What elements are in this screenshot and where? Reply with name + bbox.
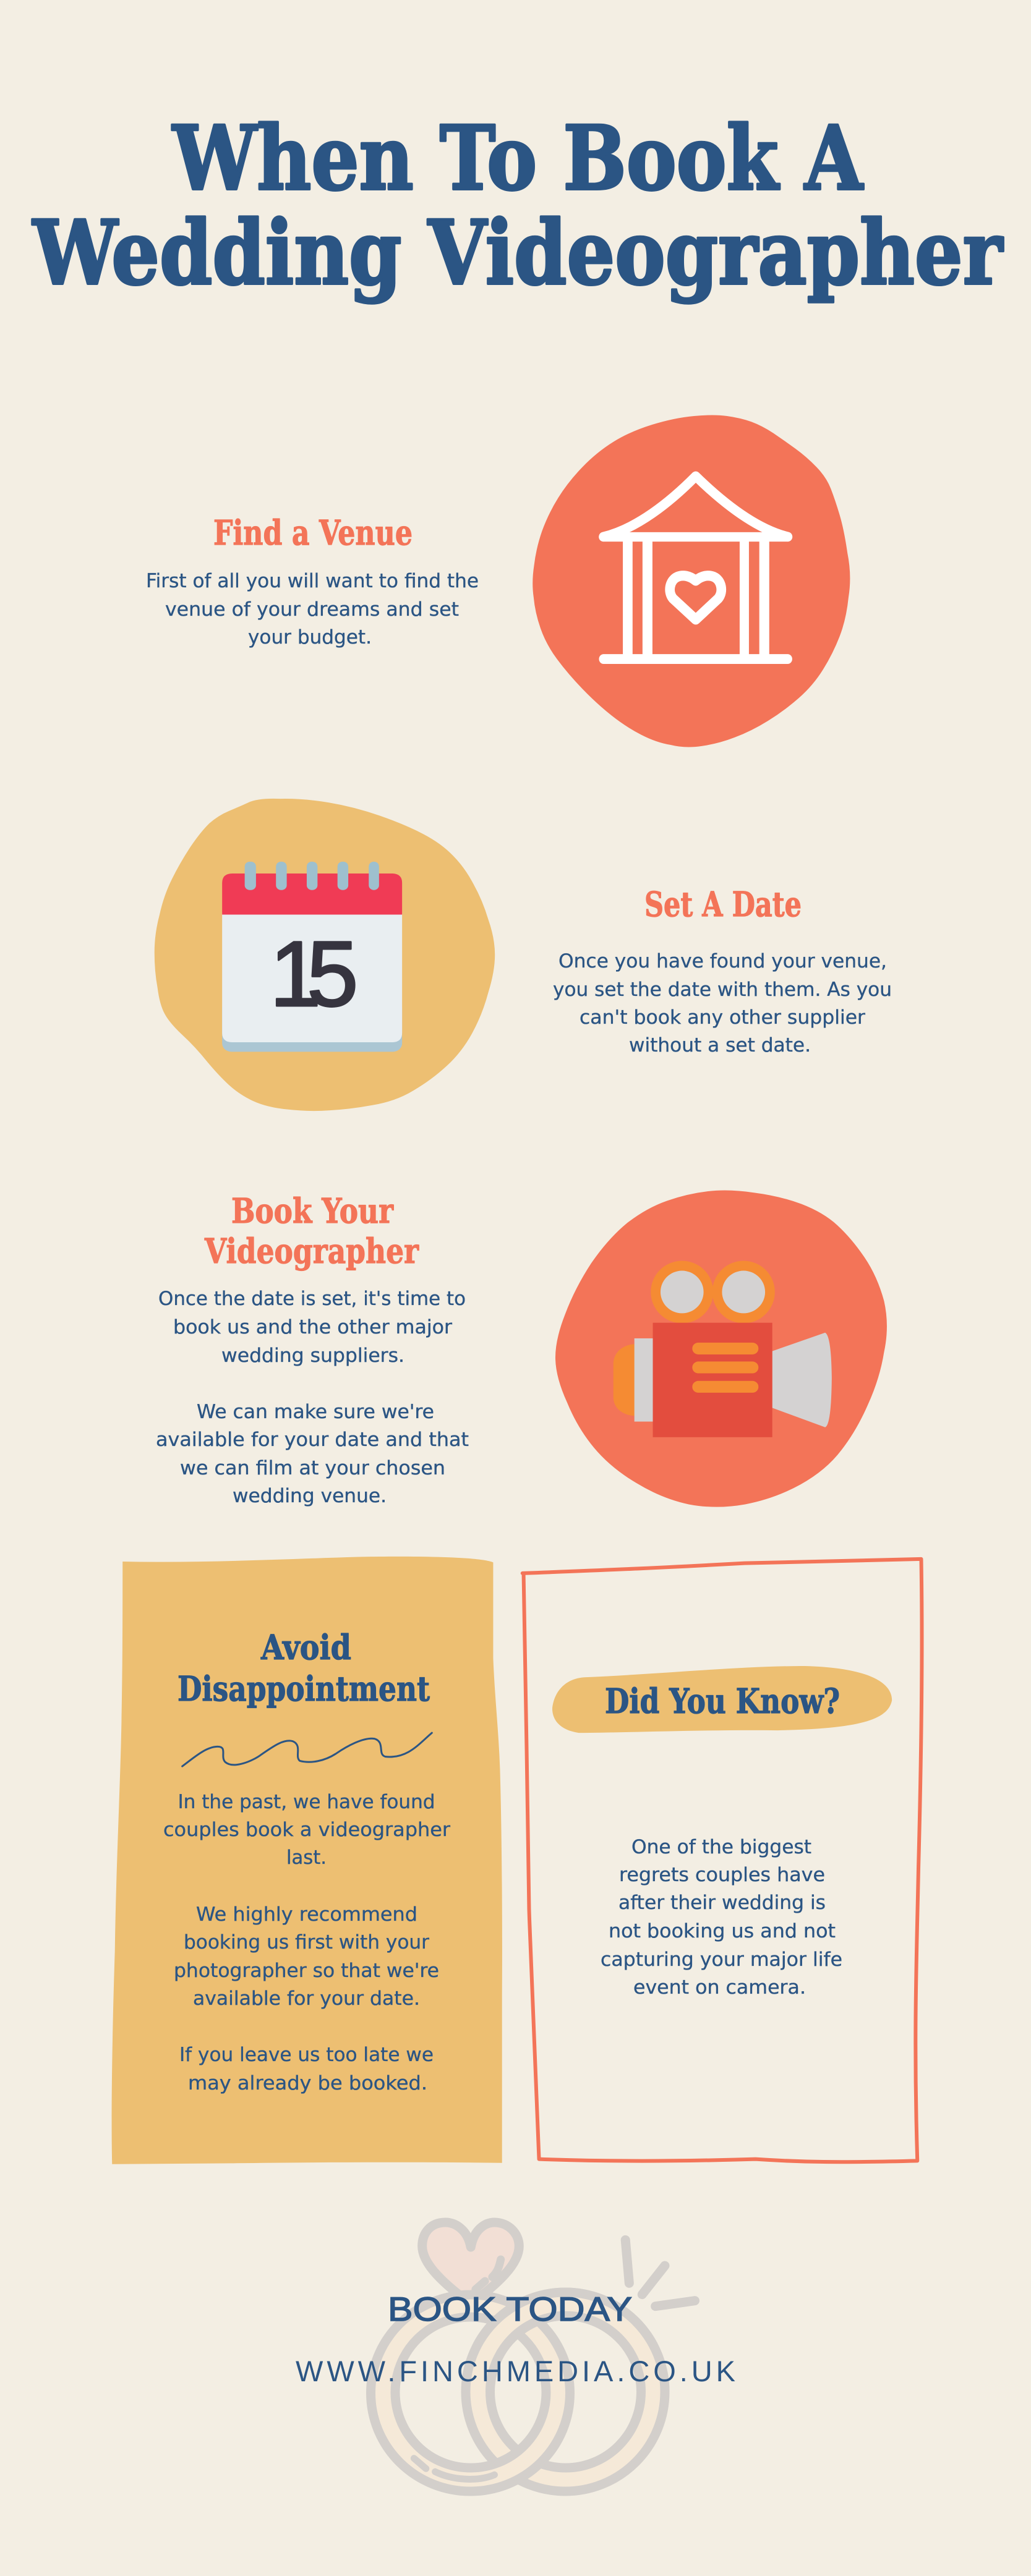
ring right: [466, 2292, 665, 2491]
text block: did you know: after their wedding is: [618, 1892, 826, 1914]
text block: set a date: you set the date with them. As you: [553, 979, 892, 1001]
icon: film camera on orange blob: [555, 1191, 887, 1507]
panel: find a venue: [146, 415, 850, 747]
text block: find a venue: First of all you will want to find the: [146, 570, 479, 592]
heading: avoid disappointment: Avoid: [260, 1627, 351, 1667]
ring right front overlap: [474, 2306, 657, 2343]
text block: did you know: not booking us and not: [609, 1920, 836, 1942]
heading: did you know: Did You Know?: [605, 1681, 840, 1721]
heading: set a date: Set A Date: [644, 884, 802, 924]
call to action: book today: BOOK TODAY: [388, 2290, 632, 2328]
ring highlight: [414, 2459, 494, 2479]
text block: avoid disappointment: couples book a videographer: [163, 1819, 450, 1841]
text block: did you know: [601, 1836, 842, 1999]
text block: avoid disappointment: We highly recommend: [196, 1903, 417, 1926]
text block: avoid disappointment: may already be booked.: [188, 2072, 427, 2094]
panel: set a date: [155, 799, 892, 1111]
heart on ring: [422, 2222, 519, 2304]
text block: book your videographer: wedding venue.: [233, 1485, 387, 1507]
text block: set a date: [553, 950, 892, 1056]
icon: wedding rings with heart: [371, 2222, 695, 2491]
panel: book today footer: [296, 2222, 735, 2491]
text block: did you know: regrets couples have: [619, 1864, 825, 1886]
squiggle line: [182, 1733, 432, 1766]
text block: avoid disappointment: last.: [286, 1847, 327, 1869]
text block: find a venue: venue of your dreams and set: [165, 598, 459, 621]
icon: calendar on yellow blob: [155, 799, 495, 1111]
hand-drawn outline box: [523, 1559, 922, 2162]
text block: find a venue: your budget.: [248, 626, 372, 648]
website url: WWW.FINCHMEDIA.CO.UK: [296, 2355, 735, 2387]
text block: book your videographer: wedding suppliers.: [221, 1345, 404, 1367]
text block: did you know: capturing your major life: [601, 1949, 842, 1971]
heading: book your videographer: [204, 1191, 419, 1271]
text block: did you know: One of the biggest: [631, 1836, 811, 1858]
text block: avoid disappointment: available for your date.: [193, 1987, 420, 2010]
panel: avoid disappointment: [112, 1557, 502, 2164]
heading: avoid disappointment: [178, 1627, 430, 1709]
text block: did you know: event on camera.: [633, 1976, 806, 1999]
heading: avoid disappointment: Disappointment: [178, 1668, 430, 1709]
text block: book your videographer: available for your date and that: [156, 1429, 469, 1451]
text block: avoid disappointment: photographer so that we're: [174, 1960, 439, 1982]
text block: avoid disappointment: In the past, we have found: [178, 1791, 435, 1813]
text block: book your videographer: Once the date is set, it's time to: [158, 1288, 466, 1310]
text block: book your videographer: we can film at your chosen: [180, 1457, 445, 1479]
text block: avoid disappointment: booking us first with your: [184, 1931, 429, 1953]
calendar number: 15: [270, 922, 358, 1026]
text block: find a venue: [146, 570, 479, 648]
text block: set a date: without a set date.: [629, 1034, 811, 1056]
yellow pill behind heading: [552, 1666, 892, 1733]
text block: set a date: can't book any other supplier: [580, 1006, 865, 1029]
heading: book your videographer: Videographer: [204, 1231, 419, 1271]
panel: did you know: [523, 1559, 922, 2162]
text block: avoid disappointment: [163, 1791, 450, 2094]
text block: book your videographer: We can make sure we're: [197, 1401, 434, 1423]
ring left: [371, 2295, 570, 2491]
title: [32, 106, 1003, 305]
text block: avoid disappointment: If you leave us too late we: [179, 2044, 434, 2066]
icon: venue house on orange blob: [533, 415, 850, 747]
text block: book your videographer: [156, 1288, 469, 1507]
panel: book your videographer: [156, 1191, 887, 1507]
title: When To Book A: [171, 106, 864, 210]
yellow panel background: [112, 1557, 502, 2164]
text block: set a date: Once you have found your venue,: [558, 950, 887, 972]
heading: book your videographer: Book Your: [231, 1191, 394, 1231]
sparkle lines: [625, 2240, 695, 2306]
heading: find a venue: Find a Venue: [213, 512, 413, 553]
text block: book your videographer: book us and the other major: [173, 1316, 452, 1338]
